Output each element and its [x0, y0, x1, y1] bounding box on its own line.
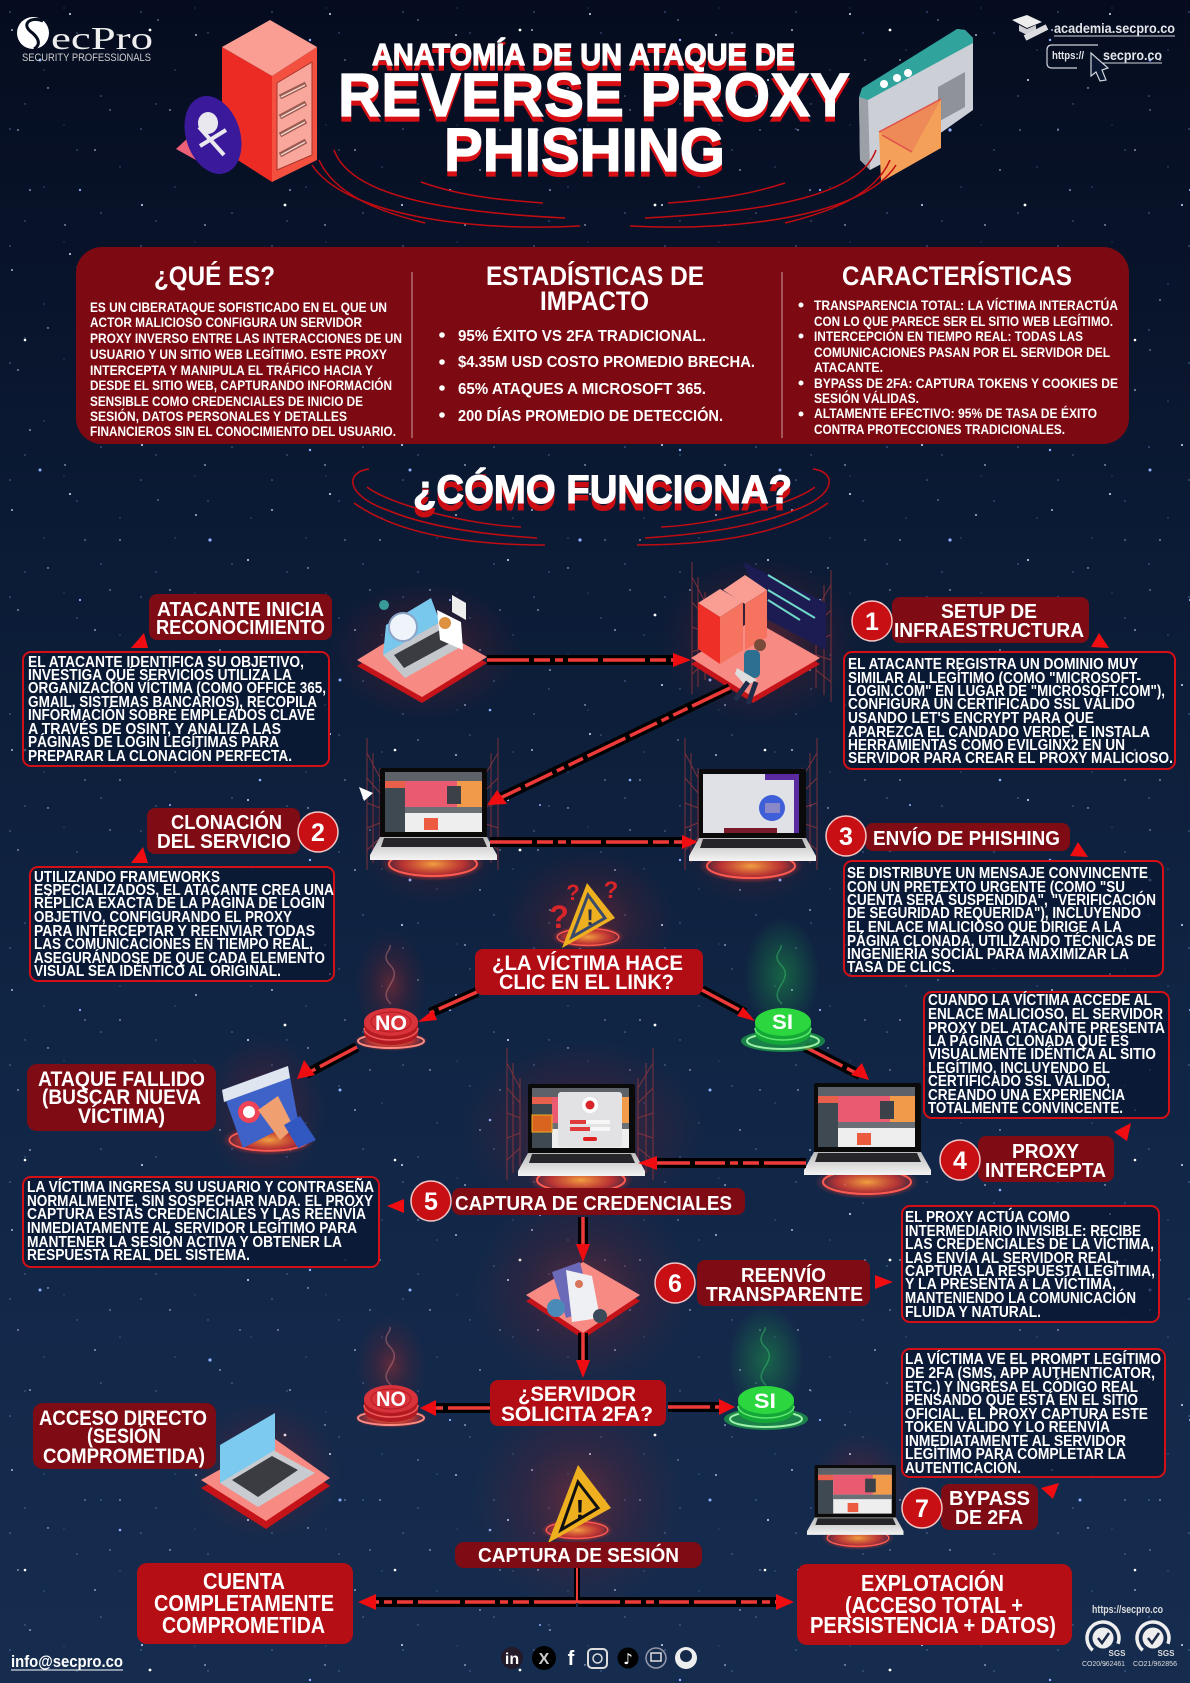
arrows: sesión to outcomes [358, 1568, 794, 1610]
logo: SecPro [17, 17, 153, 64]
list: estadísticas [439, 328, 755, 425]
text box: step 1: EL ATACANTE REGISTRA UN DOMINIO MUY [848, 656, 1138, 673]
text box: step 7: INMEDIATAMENTE AL SERVIDOR [905, 1433, 1126, 1450]
icon: laptop login [518, 1084, 645, 1197]
outcome: explotación: PERSISTENCIA + DATOS) [810, 1612, 1056, 1638]
step 6 label: TRANSPARENTE [706, 1284, 863, 1306]
text box: reconocimiento: EL ATACANTE IDENTIFICA SU OBJETIVO, [28, 654, 304, 671]
label: ataque fallido: (BUSCAR NUEVA [42, 1086, 201, 1109]
icon: warning [541, 1465, 613, 1543]
text box: step 4: LEGÍTIMO, INCLUYENDO EL [928, 1058, 1110, 1077]
icon: warning with question marks: ! [586, 905, 594, 930]
label: ataque fallido [27, 1064, 216, 1131]
text box: step 2: PARA INTERCEPTAR Y REENVIAR TODAS [34, 923, 315, 940]
icon: server [222, 20, 317, 182]
text: qué es: ACTOR MALICIOSO CONFIGURA UN SERVIDOR [90, 314, 362, 330]
social icons: X [539, 1651, 550, 1668]
title: REVERSE PROXY [338, 61, 850, 129]
label: atacante inicia: RECONOCIMIENTO [156, 617, 325, 639]
decision: la víctima hace clic: CLIC EN EL LINK? [499, 971, 674, 994]
step 5 label: 5 [424, 1188, 438, 1216]
outcome: cuenta comprometida: COMPLETAMENTE [154, 1590, 334, 1616]
text: qué es: PROXY INVERSO ENTRE LAS INTERACCIONES DE UN [90, 330, 402, 346]
contact email: info@secpro.co [11, 1652, 123, 1671]
text box: step 7: LEGÍTIMO PARA COMPLETAR LA [905, 1444, 1126, 1463]
outcome: explotación: EXPLOTACIÓN [861, 1569, 1004, 1596]
list: características: INTERCEPCIÓN EN TIEMPO REAL: TODAS LAS [814, 327, 1083, 344]
list: características: ATACANTE. [814, 359, 883, 375]
text box: step 4: CREANDO UNA EXPERIENCIA [928, 1087, 1125, 1104]
text box: step 7: TOKEN VÁLIDO Y LO REENVÍA [905, 1417, 1110, 1436]
text box: step 3 [844, 861, 1163, 976]
title arcs [312, 150, 896, 227]
website link and certificates [1080, 1604, 1177, 1668]
list: características: COMUNICACIONES PASAN POR EL SERVIDOR DEL [814, 344, 1110, 360]
text box: step 2: VISUAL SEA IDÉNTICO AL ORIGINAL. [34, 961, 281, 980]
text box: reconocimiento: INVESTIGA QUÉ SERVICIOS UTILIZA LA [28, 665, 292, 684]
title: PHISHING [444, 116, 725, 184]
icon: warning with question marks: ? [604, 877, 618, 904]
icon: laptop sesión [201, 1413, 330, 1529]
heading: cómo funciona: ¿CÓMO FUNCIONA? [413, 466, 792, 512]
text box: step 5 [23, 1176, 379, 1267]
text box: step 6: INTERMEDIARIO INVISIBLE: RECIBE [905, 1223, 1141, 1240]
badge: sgs 1: SGS [1109, 1649, 1126, 1658]
list: estadísticas: $4.35M USD COSTO PROMEDIO BRECHA. [458, 354, 755, 371]
text box: step 1: HERRAMIENTAS COMO EVILGINX2 EN UN [848, 737, 1125, 754]
outcome: explotación [797, 1564, 1072, 1645]
step 3 label [826, 816, 1088, 857]
text box: step 7 [902, 1349, 1165, 1477]
logo: SecPro: SECURITY PROFESSIONALS [22, 52, 151, 64]
step 4 label: INTERCEPTA [985, 1160, 1106, 1182]
step 5 label: CAPTURA DE CREDENCIALES [455, 1193, 732, 1215]
list: características [798, 296, 1118, 437]
list: estadísticas: 200 DÍAS PROMEDIO DE DETECCIÓN. [458, 407, 723, 425]
arrow: reconocimiento to setup [487, 653, 691, 667]
icon: browser and hand [222, 1066, 316, 1155]
top-right links: https:// [1052, 50, 1084, 62]
text box: step 5: MANTENER LA SESIÓN ACTIVA Y OBTENER LA [27, 1232, 342, 1251]
label: acceso directo: (SESIÓN [87, 1424, 161, 1448]
text box: step 1: USANDO LET'S ENCRYPT PARA QUE [848, 710, 1094, 727]
text box: step 1: SIMILAR AL LEGÍTIMO (COMO "MICROSOFT- [848, 668, 1141, 687]
label: acceso directo: ACCESO DIRECTO [39, 1407, 207, 1430]
step 2 label [131, 808, 338, 863]
list: características: BYPASS DE 2FA: CAPTURA TOKENS Y COOKIES DE [814, 375, 1118, 391]
step 7 label: DE 2FA [955, 1507, 1023, 1529]
text box: step 5: RESPUESTA REAL DEL SISTEMA. [27, 1247, 250, 1264]
step 4 label [940, 1123, 1131, 1182]
arrow: captura to documentos [576, 1217, 590, 1262]
text box: step 5: NORMALMENTE, SIN SOSPECHAR NADA. EL PROXY [27, 1193, 373, 1210]
heading: qué es: ¿QUÉ ES? [154, 260, 275, 291]
icon: laptop bypass [807, 1465, 904, 1550]
label: ataque fallido: VÍCTIMA) [78, 1105, 165, 1128]
label: acceso directo [33, 1403, 216, 1469]
badge: sgs 2: SGS [1158, 1649, 1175, 1658]
label: acceso directo: COMPROMETIDA) [43, 1445, 205, 1468]
text box: step 4: TOTALMENTE CONVINCENTE. [928, 1100, 1123, 1117]
step 5 label [387, 1181, 745, 1221]
text: qué es [90, 299, 402, 439]
button: no: NO [375, 1012, 407, 1035]
icon: warning: ! [576, 1494, 584, 1524]
heading: cómo funciona [353, 466, 829, 545]
text box: step 4: CERTIFICADO SSL VÁLIDO, [928, 1071, 1110, 1090]
text: qué es: SENSIBLE COMO CREDENCIALES DE INICIO DE [90, 393, 363, 409]
outcome: cuenta comprometida: COMPROMETIDA [162, 1612, 325, 1638]
text box: reconocimiento: PÁGINAS DE LOGIN LEGÍTIMAS PARA [28, 732, 279, 751]
text box: step 6: CAPTURA LA RESPUESTA LEGÍTIMA, [905, 1261, 1155, 1280]
text box: step 3: EL ENLACE MALICIOSO QUE DIRIGE A LA [847, 919, 1122, 936]
text box: step 5: CAPTURA ESTAS CREDENCIALES Y LAS REENVÍA [27, 1204, 366, 1223]
label: ataque fallido: ATAQUE FALLIDO [38, 1068, 205, 1091]
step 4 label: 4 [953, 1147, 967, 1175]
button: si 2fa [724, 1386, 808, 1430]
top-right links [1012, 15, 1175, 81]
text box: step 2: ASEGURÁNDOSE DE QUE CADA ELEMENTO [34, 948, 325, 967]
badge: sgs 2 [1130, 1615, 1177, 1668]
social icons [501, 1646, 697, 1670]
decision: la víctima hace clic: ¿LA VÍCTIMA HACE [492, 952, 683, 975]
social icons: f [568, 1648, 575, 1670]
step 1 label [852, 597, 1109, 648]
title [338, 37, 850, 184]
button: si [741, 1008, 825, 1052]
text box: step 6: Y LA PRESENTA A LA VÍCTIMA, [905, 1274, 1116, 1293]
text box: step 5: INMEDIATAMENTE AL SERVIDOR LEGÍTIMO PARA [27, 1218, 357, 1237]
text box: step 1: APAREZCA EL CANDADO VERDE, E INSTALA [848, 724, 1150, 741]
step 3 label: 3 [839, 823, 853, 851]
text box: step 4: LA PÁGINA CLONADA QUE ES [928, 1031, 1129, 1050]
step 7 label: BYPASS [949, 1488, 1030, 1510]
list: características: TRANSPARENCIA TOTAL: LA VÍCTIMA INTERACTÚA [814, 296, 1118, 313]
step 6 label: 6 [668, 1270, 682, 1298]
text box: step 2: RÉPLICA EXACTA DE LA PÁGINA DE LOGIN [34, 893, 325, 912]
badge: sgs 1 [1080, 1615, 1126, 1668]
text box: step 3: DE SEGURIDAD REQUERIDA"), INCLUYENDO [847, 905, 1141, 922]
outcome: cuenta comprometida [137, 1563, 353, 1644]
step 1 label: 1 [865, 608, 879, 636]
step 2 label: 2 [311, 819, 325, 847]
text box: step 4: VISUALMENTE IDÉNTICA AL SITIO [928, 1044, 1156, 1063]
text box: step 3: CON UN PRETEXTO URGENTE (COMO "SU [847, 879, 1125, 896]
icon: documents [526, 1262, 640, 1339]
text: qué es: FINANCIEROS SIN EL CONOCIMIENTO DEL USUARIO. [90, 423, 396, 439]
heading: estadísticas [486, 260, 704, 316]
button: no [354, 1008, 428, 1051]
icon: laptop proxy [804, 1083, 931, 1199]
step 2 label: CLONACIÓN [171, 810, 282, 834]
list: características: CONTRA PROTECCIONES TRADICIONALES. [814, 421, 1065, 437]
text box: step 6: MANTENIENDO LA COMUNICACIÓN [905, 1288, 1136, 1307]
icon: laptop reconnaissance [357, 595, 487, 703]
top-right links: academia.secpro.co [1054, 20, 1175, 36]
outcome: cuenta comprometida: CUENTA [203, 1568, 285, 1594]
button: no 2fa: NO [376, 1388, 406, 1411]
list: estadísticas: 95% ÉXITO VS 2FA TRADICIONAL. [458, 328, 706, 345]
arrow: clonación to envío [490, 835, 698, 849]
website link and certificates: https://secpro.co [1092, 1604, 1163, 1616]
decision: servidor solicita 2fa [490, 1380, 666, 1426]
text box: step 2: UTILIZANDO FRAMEWORKS [34, 869, 220, 886]
icon: warning with question marks: ? [566, 880, 580, 905]
text box: step 1 [844, 652, 1175, 769]
text: qué es: USUARIO Y UN SITIO WEB LEGÍTIMO. ESTE PROXY [90, 346, 388, 362]
text: qué es: SESIÓN, DATOS PERSONALES Y DETALLES [90, 407, 347, 424]
outcome: explotación: (ACCESO TOTAL + [845, 1592, 1023, 1618]
arrow: proxy to login [638, 1156, 806, 1170]
step 6 label: REENVÍO [741, 1264, 826, 1287]
arrow: setup to clonación [487, 688, 730, 805]
text: qué es: ES UN CIBERATAQUE SOFISTICADO EN EL QUE UN [90, 299, 387, 315]
arrows: 2fa branches [420, 1399, 735, 1416]
icon: skull badge [175, 89, 251, 181]
step 4 label: PROXY [1012, 1141, 1080, 1163]
badge: sgs 2: CO21/962856 [1133, 1659, 1177, 1668]
text box: reconocimiento [23, 652, 329, 766]
text box: reconocimiento: PREPARAR LA CLONACIÓN PERFECTA. [28, 746, 292, 765]
icon: servers and operator [691, 562, 826, 704]
list: estadísticas: 65% ATAQUES A MICROSOFT 365. [458, 381, 706, 398]
text box: step 3: SE DISTRIBUYE UN MENSAJE CONVINCENTE [847, 865, 1148, 882]
icon: browser with envelope [859, 29, 973, 182]
text box: step 2: OBJETIVO, CONFIGURANDO EL PROXY [34, 909, 292, 926]
list: características: SESIÓN VÁLIDAS. [814, 389, 919, 406]
text box: step 6: LAS ENVÍA AL SERVIDOR REAL, [905, 1248, 1119, 1267]
icon: warning with question marks: ? [549, 899, 569, 935]
text box: step 6: LAS CREDENCIALES DE LA VÍCTIMA, [905, 1234, 1154, 1253]
decision: la víctima hace clic [475, 949, 703, 995]
text box: step 7: AUTENTICACIÓN. [905, 1458, 1021, 1477]
text: qué es: DESDE EL SITIO WEB, CAPTURANDO INFORMACIÓN [90, 376, 392, 393]
label: captura de sesión: CAPTURA DE SESIÓN [478, 1543, 679, 1567]
button: si 2fa: SI [754, 1390, 776, 1413]
text box: reconocimiento: GMAIL, SISTEMAS BANCARIOS), RECOPILA [28, 694, 317, 711]
social icons: ♪ [623, 1650, 633, 1668]
text box: step 7: PENSANDO QUE ESTÁ EN EL SITIO [905, 1390, 1138, 1409]
heading: características: CARACTERÍSTICAS [842, 260, 1072, 291]
step 7 label [902, 1483, 1059, 1530]
text box: step 6 [902, 1206, 1159, 1322]
text box: step 1: CONFIGURA UN CERTIFICADO SSL VÁLIDO [848, 694, 1135, 713]
badge: sgs 1: CO20/962461 [1082, 1659, 1125, 1668]
arrows: decision branches [297, 990, 869, 1080]
text box: step 3: INGENIERÍA SOCIAL PARA MAXIMIZAR LA [847, 944, 1129, 963]
label: atacante inicia [131, 594, 332, 648]
step 6 label [655, 1260, 893, 1306]
icon: laptop clonación [359, 768, 497, 881]
top-right links: secpro.co [1103, 47, 1162, 63]
text box: step 4 [924, 990, 1169, 1118]
step 1 label: SETUP DE [941, 601, 1037, 623]
step 2 label: DEL SERVICIO [157, 831, 291, 853]
step 1 label: INFRAESTRUCTURA [894, 620, 1084, 642]
button: no 2fa [354, 1385, 428, 1428]
heading: estadísticas: IMPACTO [540, 286, 649, 316]
panel: summary [76, 247, 1129, 444]
text box: step 7: OFICIAL. EL PROXY CAPTURA ESTE [905, 1406, 1148, 1423]
list: características: ALTAMENTE EFECTIVO: 95% DE TASA DE ÉXITO [814, 405, 1097, 421]
icon: laptop phishing [689, 769, 816, 883]
logo: SecPro: ecPro [51, 20, 153, 56]
text box: step 6: FLUIDA Y NATURAL. [905, 1304, 1041, 1321]
decision: servidor solicita 2fa: SOLICITA 2FA? [501, 1403, 653, 1426]
text box: step 2: LAS COMUNICACIONES EN TIEMPO REAL, [34, 936, 313, 953]
button: si: SI [772, 1011, 793, 1034]
decision: servidor solicita 2fa: ¿SERVIDOR [518, 1383, 636, 1406]
text box: step 3: TASA DE CLICS. [847, 959, 955, 976]
text box: step 7: ETC.) Y INGRESA EL CÓDIGO REAL [905, 1377, 1138, 1396]
arrow: documentos to 2fa [576, 1333, 590, 1378]
text: qué es: INTERCEPTA Y MANIPULA EL TRÁFICO HACIA Y [90, 362, 374, 378]
text box: step 2: ESPECIALIZADOS, EL ATACANTE CREA UNA [34, 882, 334, 899]
text box: reconocimiento: A TRAVÉS DE OSINT, Y ANALIZA LAS [28, 719, 281, 738]
text box: step 4: CUANDO LA VÍCTIMA ACCEDE AL [928, 990, 1152, 1009]
text box: reconocimiento: ORGANIZACIÓN VÍCTIMA (COMO OFFICE 365, [28, 678, 326, 697]
text box: reconocimiento: INFORMACIÓN SOBRE EMPLEADOS CLAVE [28, 705, 315, 724]
icon: warning with question marks [549, 877, 624, 949]
text box: step 5: LA VÍCTIMA INGRESA SU USUARIO Y CONTRASEÑA [27, 1176, 374, 1196]
text box: step 2 [30, 867, 334, 981]
text box: step 7: DE 2FA (SMS, APP AUTHENTICATOR, [905, 1365, 1155, 1382]
title: ANATOMÍA DE UN ATAQUE DE [372, 37, 795, 72]
heading: estadísticas: ESTADÍSTICAS DE [486, 260, 704, 291]
step 7 label: 7 [915, 1495, 929, 1523]
step 3 label: ENVÍO DE PHISHING [873, 827, 1060, 850]
label: atacante inicia: ATACANTE INICIA [157, 599, 324, 621]
social icons: in [505, 1651, 519, 1668]
text box: step 6: EL PROXY ACTÚA COMO [905, 1207, 1070, 1226]
list: características: CON LO QUE PARECE SER EL SITIO WEB LEGÍTIMO. [814, 313, 1113, 329]
